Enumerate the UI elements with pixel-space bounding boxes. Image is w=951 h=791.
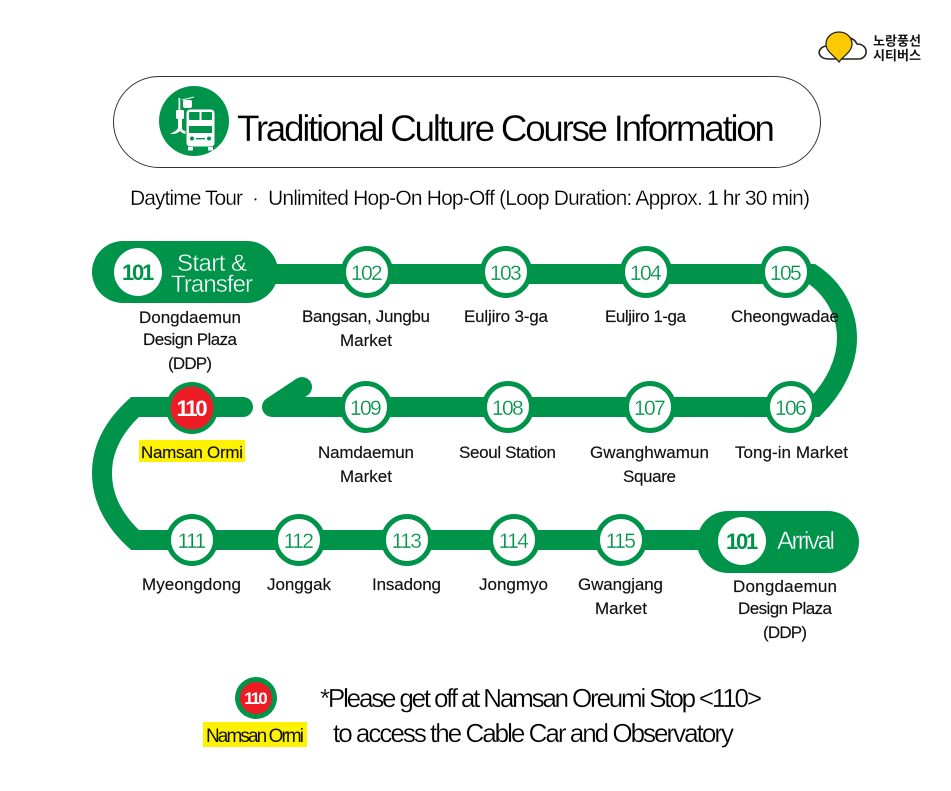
note text <box>320 683 762 748</box>
icon: tower, cable car and double-decker bus <box>159 86 229 156</box>
stop 108 <box>484 384 532 430</box>
label: Bangsan, Jungbu Market: Bangsan, Jungbu <box>302 307 430 326</box>
stop 112: 112 <box>284 530 313 553</box>
stop 105 <box>762 248 810 296</box>
label: Dongdaemun Design Plaza (arrival): Dongdaemun <box>733 577 837 596</box>
stop 108: 108 <box>492 397 523 420</box>
stop 110 <box>166 382 218 434</box>
label: Gwangjang Market: Market <box>595 599 647 618</box>
label: Jongmyo: Jongmyo <box>479 575 548 594</box>
label: Seoul Station: Seoul Station <box>459 443 556 462</box>
subtitle: Daytime Tour <box>130 187 243 210</box>
start pill: Transfer <box>171 271 253 298</box>
label: Myeongdong: Myeongdong <box>142 575 241 594</box>
label: Insadong: Insadong <box>372 575 441 594</box>
label: Dongdaemun Design Plaza (start): Dongdaemun <box>139 308 241 327</box>
stop 107: 107 <box>634 397 665 420</box>
label: Cheongwadae: Cheongwadae <box>731 307 839 326</box>
label: Namdaemun Market: Namdaemun <box>318 443 414 462</box>
label: Euljiro 1-ga: Euljiro 1-ga <box>605 307 687 326</box>
label: Dongdaemun Design Plaza (arrival) <box>733 577 837 642</box>
label: Gwangjang Market: Gwangjang <box>578 575 663 594</box>
stop 109: 109 <box>350 397 381 420</box>
stop 114: 114 <box>499 530 529 553</box>
arrival pill: 101 <box>726 529 758 554</box>
label: Euljiro 3-ga: Euljiro 3-ga <box>464 307 549 326</box>
title banner <box>114 76 820 168</box>
stop 106: 106 <box>775 397 806 420</box>
stop 107 <box>626 384 674 430</box>
label: Dongdaemun Design Plaza (start) <box>139 308 241 373</box>
note text: to access the Cable Car and Observatory <box>333 718 734 748</box>
stop 113 <box>384 516 430 564</box>
logo: yellow balloon city bus <box>819 32 921 63</box>
stop 103 <box>482 248 530 296</box>
stop 102 <box>344 248 390 296</box>
stop 106 <box>768 384 814 430</box>
stop 115: 115 <box>606 530 635 553</box>
stop 115 <box>598 516 644 564</box>
start pill: 101 <box>122 260 154 285</box>
stop 109 <box>342 384 390 430</box>
stop 113: 113 <box>392 530 421 553</box>
stop 110: 110 <box>177 396 207 421</box>
label: Namsan Ormi highlighted: Namsan Ormi <box>141 443 243 462</box>
subtitle: · <box>252 187 259 210</box>
start pill <box>92 241 278 303</box>
label: Dongdaemun Design Plaza (start): (DDP) <box>168 354 212 373</box>
label: Namdaemun Market <box>318 443 414 486</box>
subtitle: Unlimited Hop-On Hop-Off (Loop Duration: Approx. 1 hr 30 min) <box>268 187 810 210</box>
stop 112 <box>276 516 322 564</box>
label: Gwangjang Market <box>578 575 663 618</box>
start pill: Start & <box>177 250 247 277</box>
stop 104 <box>622 248 670 296</box>
title text: Traditional Culture Course Information <box>237 108 775 149</box>
stop 111: 111 <box>177 530 205 553</box>
stop 102: 102 <box>351 262 382 285</box>
label: Dongdaemun Design Plaza (arrival): (DDP) <box>763 623 807 642</box>
legend: stop 110 marker: Namsan Ormi <box>206 726 304 747</box>
arrival pill <box>697 511 859 573</box>
stop 104: 104 <box>630 262 662 285</box>
stop 114 <box>490 516 538 564</box>
label: Bangsan, Jungbu Market: Market <box>340 331 392 350</box>
note text: *Please get off at Namsan Oreumi Stop <110> <box>320 683 762 713</box>
stop 111 <box>168 516 216 564</box>
label: Jonggak: Jonggak <box>267 575 332 594</box>
label: Namdaemun Market: Market <box>340 467 392 486</box>
label: Gwanghwamun Square: Gwanghwamun <box>590 443 709 462</box>
route line <box>102 274 847 540</box>
legend: stop 110 marker: 110 <box>244 689 267 708</box>
label: Bangsan, Jungbu Market <box>302 307 430 350</box>
label: Dongdaemun Design Plaza (start): Design Plaza <box>143 330 238 349</box>
label: Gwanghwamun Square <box>590 443 709 486</box>
label: Dongdaemun Design Plaza (arrival): Design Plaza <box>738 599 833 618</box>
label: Tong-in Market: Tong-in Market <box>735 443 848 462</box>
legend: stop 110 marker <box>203 677 307 747</box>
arrival pill: Arrival <box>777 527 835 555</box>
stop 105: 105 <box>770 262 801 285</box>
logo: yellow balloon city bus: 노랑풍선 <box>873 34 921 48</box>
label: Gwanghwamun Square: Square <box>623 467 676 486</box>
logo: yellow balloon city bus: 시티버스 <box>873 48 921 63</box>
stop 103: 103 <box>490 262 521 285</box>
